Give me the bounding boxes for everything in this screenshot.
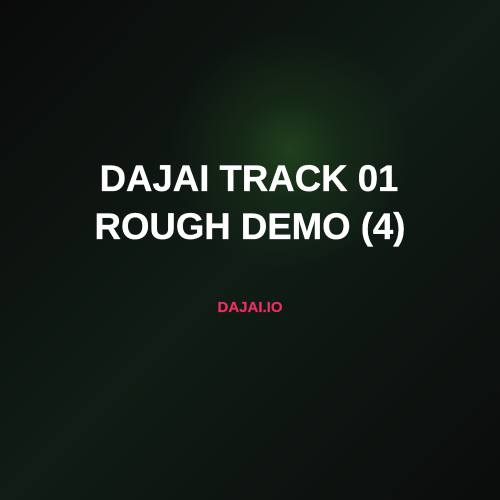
brand label: DAJAI.IO bbox=[217, 299, 282, 316]
title line 1: DAJAI TRACK 01 bbox=[100, 158, 398, 199]
title line 2: ROUGH DEMO (4) bbox=[95, 206, 405, 247]
